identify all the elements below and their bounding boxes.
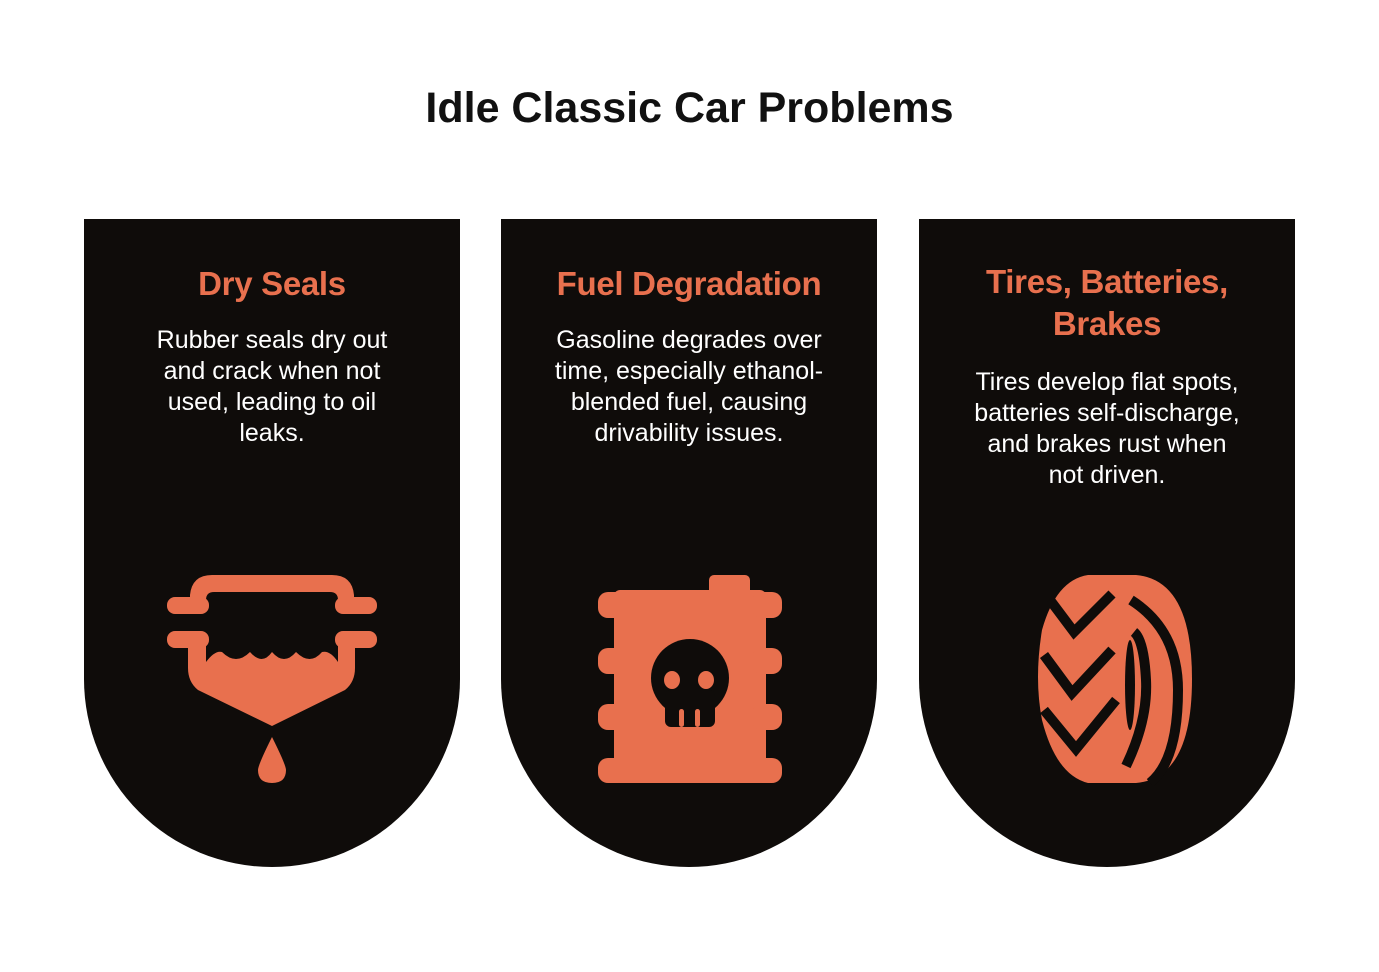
title: Idle Classic Car Problems — [425, 84, 954, 132]
icon: oil seal leak — [167, 575, 377, 783]
panel: dry seals — [84, 219, 460, 867]
panel: tires batteries brakes — [919, 219, 1295, 867]
heading: tires batteries brakes: Tires, Batteries, — [986, 263, 1228, 300]
heading: tires batteries brakes: Brakes — [1053, 305, 1161, 342]
heading: dry seals: Dry Seals — [198, 265, 346, 302]
heading: fuel degradation: Fuel Degradation — [557, 265, 821, 302]
icon: fuel barrel with skull — [598, 575, 782, 783]
icon: tire — [1038, 575, 1192, 783]
text: dry seals: Rubber seals dry out and crack when not used, leading to oil leaks. — [157, 326, 387, 447]
heading: tires batteries brakes — [986, 263, 1228, 342]
text: fuel degradation: Gasoline degrades over time, especially ethanol-blended fuel, causing drivability issues. — [555, 326, 823, 447]
text: tires batteries brakes: Tires develop flat spots, batteries self-discharge, and brakes rust when not driven. — [974, 368, 1240, 489]
panel: fuel degradation — [501, 219, 877, 867]
